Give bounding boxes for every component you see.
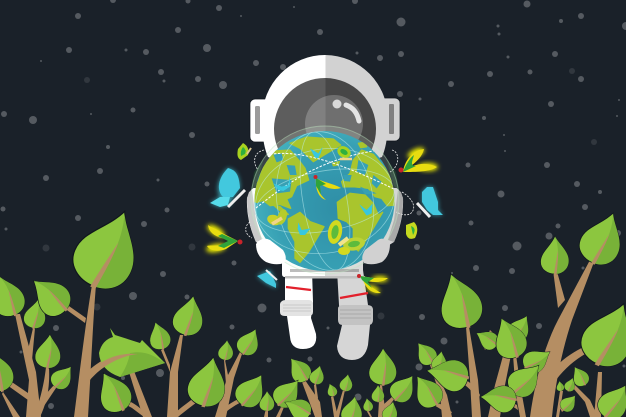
helmet ear left [250,99,274,142]
left glove [256,239,286,264]
yellow butterflies [237,143,417,255]
eurasia [342,150,397,206]
small butterfly lower right [406,222,417,239]
firefly lower right [357,274,388,295]
africa [337,193,383,251]
flight paths [256,150,396,208]
fireflies [205,146,438,295]
iceland [333,162,339,166]
torso [282,255,365,278]
astronaut gloves [256,239,390,264]
astronaut helmet [250,55,400,180]
suit side left [247,188,300,262]
south america [288,212,324,262]
visor [274,78,376,180]
astronaut legs and torso [247,158,403,360]
butterfly lower [257,270,277,288]
left leg [280,270,316,349]
shadow patches [251,158,399,190]
helmet ear right [376,98,400,141]
firefly left [205,222,242,254]
butterfly left [210,168,245,207]
small butterfly upper left [237,143,251,160]
leaves left [0,199,274,417]
glass halo [251,126,399,274]
globe [247,124,403,278]
left plants [0,199,274,417]
suit side right [350,188,403,262]
firefly on globe [314,175,341,200]
globe butterfly large [326,219,366,255]
firefly right top [398,146,438,172]
right plants [268,205,626,417]
blue butterflies [210,147,443,288]
central america [273,205,288,215]
grid lines [255,131,394,270]
stems left [0,285,268,417]
north america [250,150,309,208]
helmet shell [262,55,388,175]
stems right [276,260,618,417]
continents [250,137,397,262]
right glove [362,239,390,264]
ocean [254,131,394,271]
orbit dashes [246,150,414,238]
inland waters [272,153,382,194]
butterflies on globe [273,147,373,235]
globe butterfly top [335,144,353,160]
butterfly right [417,187,443,217]
globe butterfly left [266,208,289,227]
right leg [337,270,373,360]
leaves right [268,205,626,417]
greenland [290,137,341,162]
